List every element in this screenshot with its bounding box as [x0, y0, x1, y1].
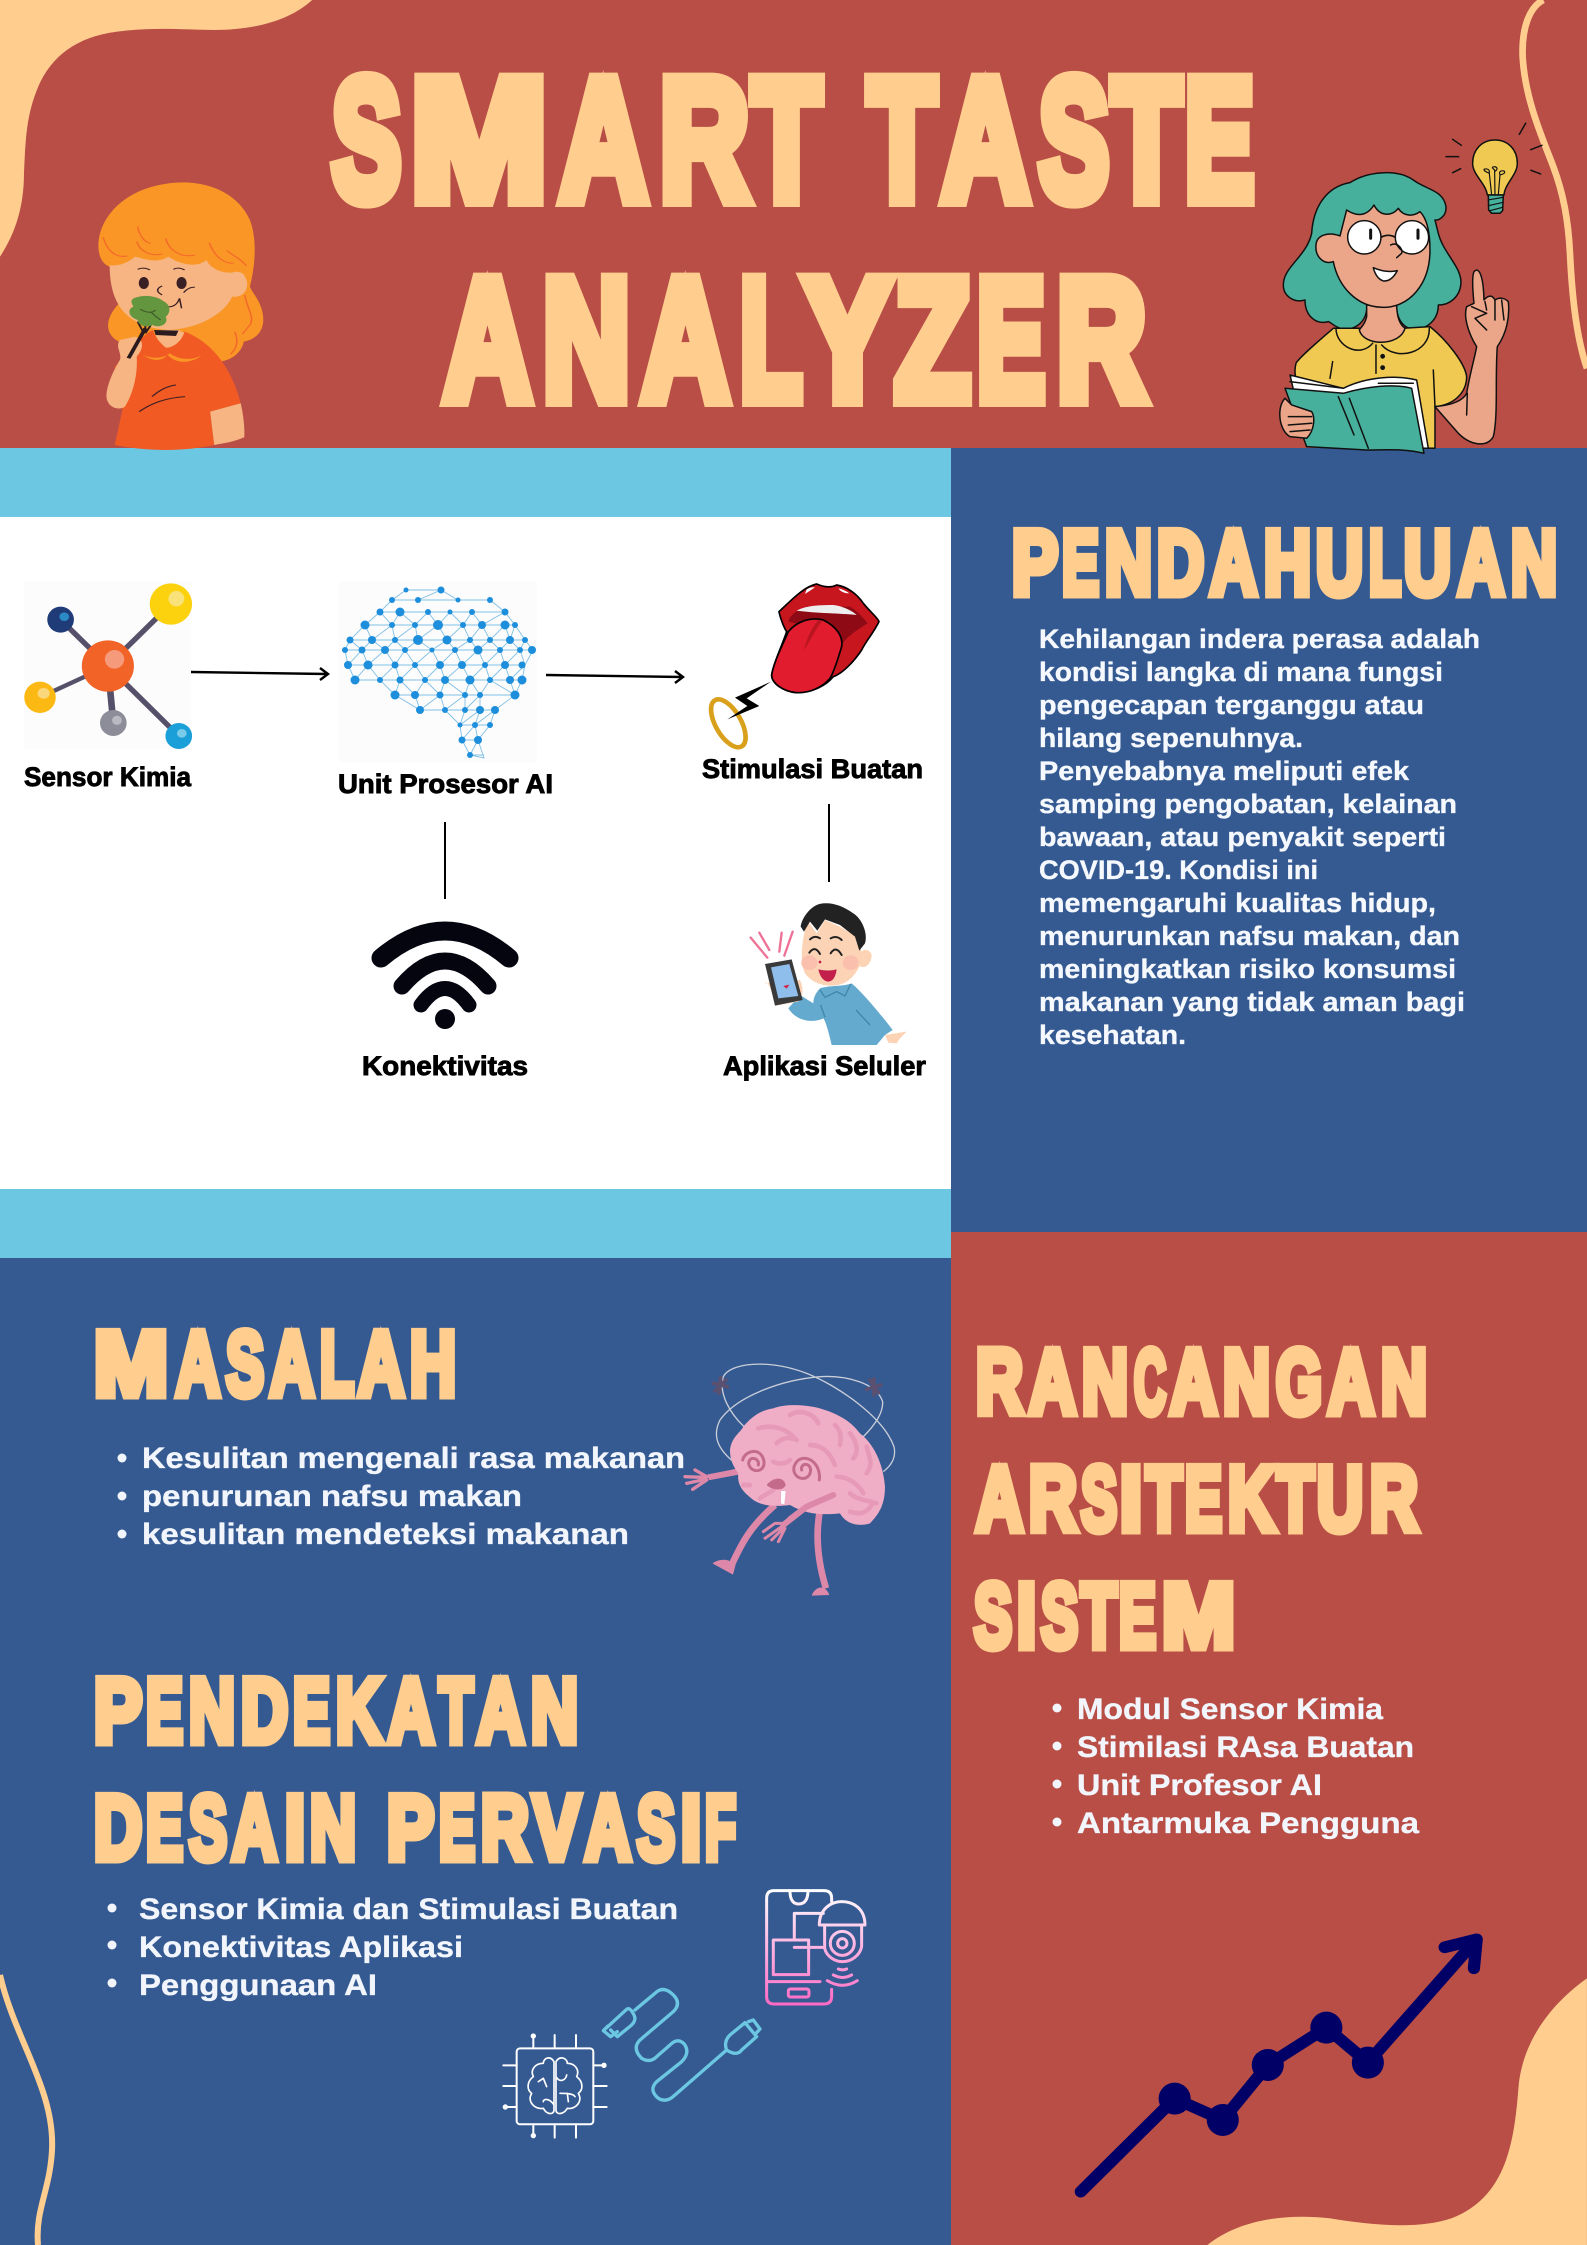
list: rancangan: Stimilasi RAsa Buatan [1077, 1731, 1414, 1764]
heading: pendekatan desain pervasif: N [189, 1661, 235, 1762]
heading: pendekatan desain pervasif: V [533, 1778, 580, 1879]
heading: rancangan arsitektur sistem: C [1134, 1332, 1166, 1433]
paragraph: pendahuluan: makanan yang tidak aman bagi [1039, 987, 1465, 1017]
heading: rancangan arsitektur sistem: T [1146, 1449, 1182, 1550]
arrow: sensor to processor [191, 668, 328, 680]
heading: pendahuluan: A [1458, 513, 1504, 614]
heading: pendekatan desain pervasif: D [94, 1778, 142, 1879]
title: L [740, 244, 802, 436]
icon: phone and camera [767, 1891, 865, 2004]
list: masalah [118, 1442, 685, 1551]
icon: chemical sensor molecule [24, 582, 192, 749]
title: E [1185, 44, 1254, 236]
illustration: girl eating broccoli [98, 182, 263, 450]
list: masalah: kesulitan mendeteksi makanan [142, 1518, 629, 1551]
paragraph: pendahuluan: menurunkan nafsu makan, dan [1039, 921, 1460, 951]
heading: rancangan arsitektur sistem: A [976, 1449, 1023, 1550]
light blue band top [0, 448, 951, 517]
arrow: processor to stimulation [546, 671, 683, 683]
title: M [411, 44, 547, 236]
heading: pendahuluan: L [1369, 513, 1401, 614]
list: masalah: penurunan nafsu makan [142, 1480, 522, 1513]
icon: dizzy brain character [685, 1364, 895, 1596]
heading: rancangan arsitektur sistem: A [1328, 1332, 1374, 1433]
heading: pendahuluan: N [1511, 513, 1557, 614]
paragraph: pendahuluan [1039, 624, 1480, 1050]
heading: pendahuluan: H [1264, 513, 1311, 614]
title: A [560, 44, 647, 236]
list: rancangan: Antarmuka Pengguna [1077, 1807, 1419, 1840]
paragraph: pendahuluan: bawaan, atau penyakit seperti [1039, 822, 1446, 852]
heading: pendekatan desain pervasif: A [232, 1778, 277, 1879]
label: Stimulasi Buatan: Stimulasi Buatan [702, 754, 923, 784]
title: A [642, 244, 729, 436]
header squiggle line [1523, 0, 1587, 368]
heading: pendekatan desain pervasif: A [477, 1661, 524, 1762]
paragraph: pendahuluan: memengaruhi kualitas hidup, [1039, 888, 1436, 918]
section: rancangan arsitektur sistem [974, 1332, 1427, 1840]
heading: rancangan arsitektur sistem: R [1370, 1449, 1418, 1550]
connector: stimulation to mobile app [828, 804, 830, 882]
list: pendekatan [108, 1893, 678, 2002]
illustration: girl with book and light bulb [1280, 123, 1542, 453]
heading: rancangan arsitektur sistem: A [1170, 1332, 1217, 1433]
heading: masalah: A [270, 1314, 314, 1415]
heading: rancangan arsitektur sistem: I [1017, 1566, 1036, 1667]
heading: rancangan arsitektur sistem: R [1029, 1449, 1077, 1550]
decorative cream curve bottom left [0, 1975, 52, 2245]
heading: pendekatan desain pervasif: P [94, 1661, 142, 1762]
system diagram [24, 582, 926, 1081]
heading: pendahuluan: E [1062, 513, 1099, 614]
paragraph: pendahuluan: pengecapan terganggu atau [1039, 690, 1424, 720]
white diagram panel [0, 517, 951, 1189]
heading: pendekatan desain pervasif: E [439, 1778, 475, 1879]
heading: masalah: M [94, 1314, 168, 1415]
panel: pendahuluan background [951, 448, 1587, 1232]
list: rancangan: Unit Profesor AI [1077, 1769, 1322, 1802]
heading: pendekatan desain pervasif: I [681, 1778, 701, 1879]
heading: pendekatan desain pervasif: S [637, 1778, 675, 1879]
heading: masalah: H [410, 1314, 456, 1415]
paragraph: pendahuluan: meningkatkan risiko konsumsi [1039, 954, 1456, 984]
heading: pendahuluan: P [1012, 513, 1058, 614]
panel: rancangan background [951, 1232, 1587, 2245]
icon: neural network brain [338, 582, 537, 762]
heading: pendekatan desain pervasif: R [481, 1778, 529, 1879]
title: Y [804, 244, 891, 436]
paragraph: pendahuluan: kesehatan. [1039, 1020, 1186, 1050]
heading: rancangan arsitektur sistem: K [1228, 1449, 1275, 1550]
heading: pendekatan desain pervasif: P [387, 1778, 434, 1879]
label: Unit Prosesor AI: Unit Prosesor AI [338, 769, 553, 799]
title: R [1057, 244, 1146, 436]
list: masalah: Kesulitan mengenali rasa makanan [142, 1442, 685, 1475]
section: pendahuluan [1012, 513, 1557, 1050]
light blue band bottom [0, 1189, 951, 1258]
heading: pendekatan desain pervasif: D [241, 1661, 288, 1762]
title: A [444, 244, 531, 436]
title: T [868, 44, 936, 236]
heading: rancangan arsitektur sistem: M [1162, 1566, 1235, 1667]
heading: rancangan arsitektur sistem: T [1277, 1449, 1314, 1550]
paragraph: pendahuluan: Kehilangan indera perasa adalah [1039, 624, 1480, 654]
header cream blob [0, 0, 312, 257]
title: S [332, 44, 401, 236]
list: pendekatan: Konektivitas Aplikasi [139, 1931, 463, 1964]
heading: masalah: L [320, 1314, 354, 1415]
list: rancangan [1052, 1693, 1419, 1840]
chart: rising line with arrow [1081, 1939, 1477, 2192]
heading: pendekatan desain pervasif: E [146, 1778, 183, 1879]
heading: masalah: A [358, 1314, 404, 1415]
heading: pendekatan desain pervasif: N [310, 1778, 356, 1879]
heading: pendekatan desain pervasif: N [531, 1661, 578, 1762]
heading: rancangan arsitektur sistem: U [1317, 1449, 1363, 1550]
list: rancangan: Modul Sensor Kimia [1077, 1693, 1383, 1726]
icon: usb cable [603, 1990, 760, 2100]
heading: pendahuluan: U [1316, 513, 1363, 614]
title: N [543, 244, 630, 436]
tech icons [503, 1891, 865, 2138]
heading: pendahuluan: N [1105, 513, 1152, 614]
paragraph: pendahuluan: hilang sepenuhnya. [1039, 723, 1303, 753]
heading: rancangan arsitektur sistem: T [1081, 1566, 1117, 1667]
heading: rancangan arsitektur sistem: R [976, 1332, 1023, 1433]
bottom right cream blob [1207, 1978, 1587, 2245]
heading: rancangan arsitektur sistem: E [1185, 1449, 1222, 1550]
paragraph: pendahuluan: samping pengobatan, kelainan [1039, 789, 1457, 819]
heading: rancangan arsitektur sistem: N [1223, 1332, 1270, 1433]
title: A [942, 44, 1029, 236]
heading: pendahuluan: U [1404, 513, 1451, 614]
heading: rancangan arsitektur sistem: S [1081, 1449, 1117, 1550]
icon: tongue with electric stimulation [704, 584, 879, 753]
connector: processor to connectivity [444, 822, 446, 899]
heading: pendekatan desain pervasif: S [189, 1778, 227, 1879]
heading: rancangan arsitektur sistem: S [974, 1566, 1012, 1667]
label: Aplikasi Seluler: Aplikasi Seluler [723, 1051, 926, 1081]
label: Sensor Kimia: Sensor Kimia [24, 762, 192, 792]
heading: pendekatan desain pervasif: K [336, 1661, 382, 1762]
title: R [660, 44, 749, 236]
title: T [1112, 44, 1181, 236]
heading: rancangan arsitektur sistem: N [1381, 1332, 1427, 1433]
heading: pendekatan desain pervasif: E [146, 1661, 183, 1762]
heading: rancangan arsitektur sistem: A [1029, 1332, 1076, 1433]
heading: pendahuluan: A [1210, 513, 1257, 614]
heading: pendekatan desain pervasif: A [585, 1778, 631, 1879]
title: T [752, 44, 821, 236]
heading: pendekatan desain pervasif: A [388, 1661, 434, 1762]
heading: masalah: A [176, 1314, 220, 1415]
heading: pendekatan desain pervasif: I [285, 1778, 305, 1879]
heading: masalah: S [226, 1314, 264, 1415]
list: pendekatan: Sensor Kimia dan Stimulasi Buatan [139, 1893, 678, 1926]
heading: rancangan arsitektur sistem: S [1041, 1566, 1078, 1667]
paragraph: pendahuluan: Penyebabnya meliputi efek [1039, 756, 1410, 786]
heading: pendekatan desain pervasif: F [705, 1778, 736, 1879]
icon: wifi [381, 931, 509, 1029]
icon: brain chip [503, 2034, 607, 2138]
panel: masalah and pendekatan background [0, 1258, 951, 2245]
paragraph: pendahuluan: kondisi langka di mana fungsi [1039, 657, 1443, 687]
title: E [977, 244, 1045, 436]
heading: pendahuluan: D [1157, 513, 1204, 614]
heading: rancangan arsitektur sistem: I [1120, 1449, 1142, 1550]
heading: rancangan arsitektur sistem [974, 1332, 1427, 1667]
section: masalah [94, 1314, 685, 1551]
heading: rancangan arsitektur sistem: G [1276, 1332, 1322, 1433]
heading: rancangan arsitektur sistem: N [1082, 1332, 1128, 1433]
heading: pendekatan desain pervasif [94, 1661, 736, 1879]
title: S [1039, 44, 1109, 236]
heading: rancangan arsitektur sistem: E [1119, 1566, 1156, 1667]
label: Konektivitas: Konektivitas [362, 1051, 528, 1081]
header background [0, 0, 1587, 448]
section: pendekatan desain pervasif [94, 1661, 736, 2002]
heading: pendekatan desain pervasif: T [439, 1661, 473, 1762]
list: pendekatan: Penggunaan AI [139, 1969, 377, 2002]
title: Z [895, 244, 970, 436]
title [332, 44, 1254, 436]
paragraph: pendahuluan: COVID-19. Kondisi ini [1039, 855, 1318, 885]
icon: man using phone [751, 903, 907, 1045]
light bulb [1446, 123, 1542, 213]
heading: pendekatan desain pervasif: E [293, 1661, 330, 1762]
